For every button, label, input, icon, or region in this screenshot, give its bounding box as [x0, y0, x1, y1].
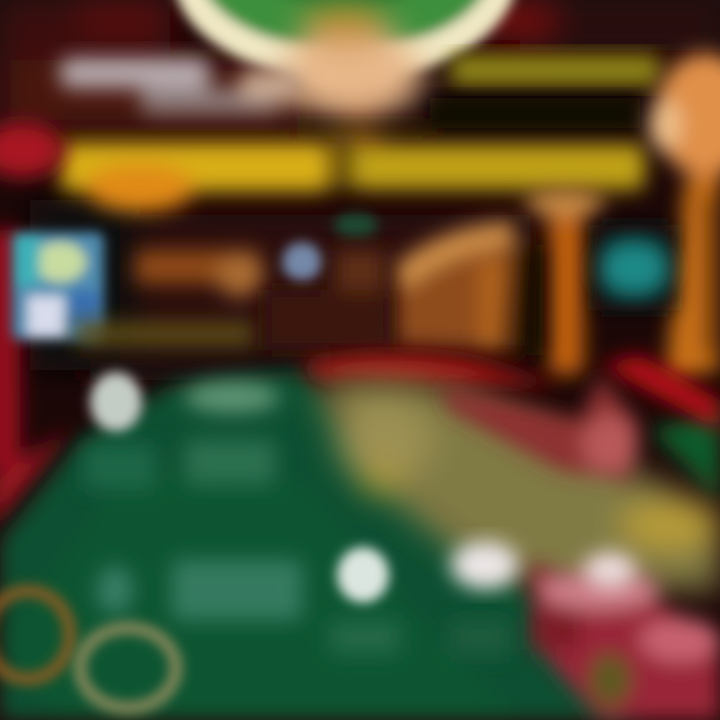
icon: gold ring center — [80, 628, 176, 708]
dark band — [290, 98, 640, 134]
top arch — [173, 0, 517, 80]
chip stack — [530, 565, 720, 720]
white chips — [451, 541, 636, 589]
arched orange panel — [395, 222, 543, 355]
teal screen — [595, 225, 675, 310]
heading: yellow title line — [450, 54, 660, 86]
icon: white spade — [90, 372, 142, 432]
dark columns — [265, 250, 390, 350]
red chips row — [440, 375, 640, 480]
betting layout: gold felt — [315, 378, 720, 590]
panel: upper hall backdrop — [0, 0, 720, 380]
green table — [0, 370, 720, 720]
icon: small blue badge — [282, 213, 378, 282]
left red panel — [0, 122, 70, 530]
red table rim — [300, 354, 720, 430]
icon: white circle — [337, 547, 389, 603]
right trophy — [649, 53, 720, 380]
heading: white title line — [60, 58, 300, 114]
heading: main yellow title — [60, 135, 645, 212]
text block: table labels — [85, 381, 510, 655]
pillar — [525, 189, 605, 375]
top center glow — [280, 7, 424, 160]
icon: blue and white tile — [12, 232, 104, 340]
icon: gold ring left — [0, 591, 70, 679]
text block: orange middle text — [75, 250, 264, 346]
